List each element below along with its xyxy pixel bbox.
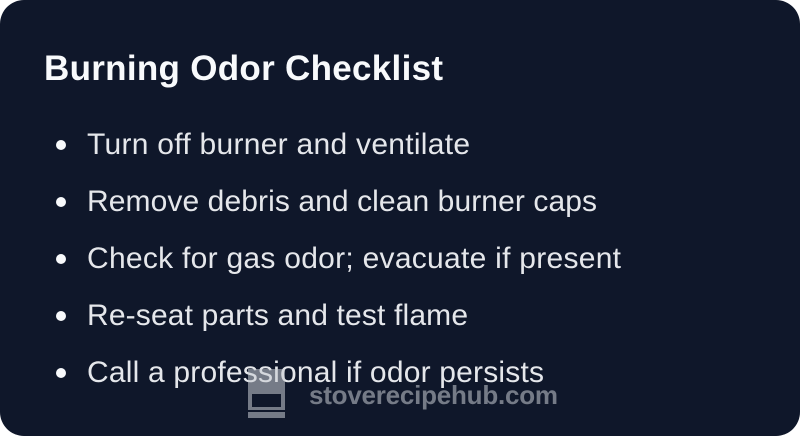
watermark: stove logo and site name (248, 369, 558, 418)
item 2: Remove debris and clean burner caps (87, 185, 597, 218)
icon: stove (248, 369, 285, 418)
item 4: Re-seat parts and test flame (87, 299, 468, 332)
title: Burning Odor Checklist (44, 49, 443, 88)
item 1: Turn off burner and ventilate (87, 128, 470, 161)
checklist items (56, 128, 622, 389)
item 3: Check for gas odor; evacuate if present (87, 242, 622, 275)
watermark text: stoverecipehub.com (309, 380, 558, 410)
item 5: Call a professional if odor persists (87, 356, 544, 389)
